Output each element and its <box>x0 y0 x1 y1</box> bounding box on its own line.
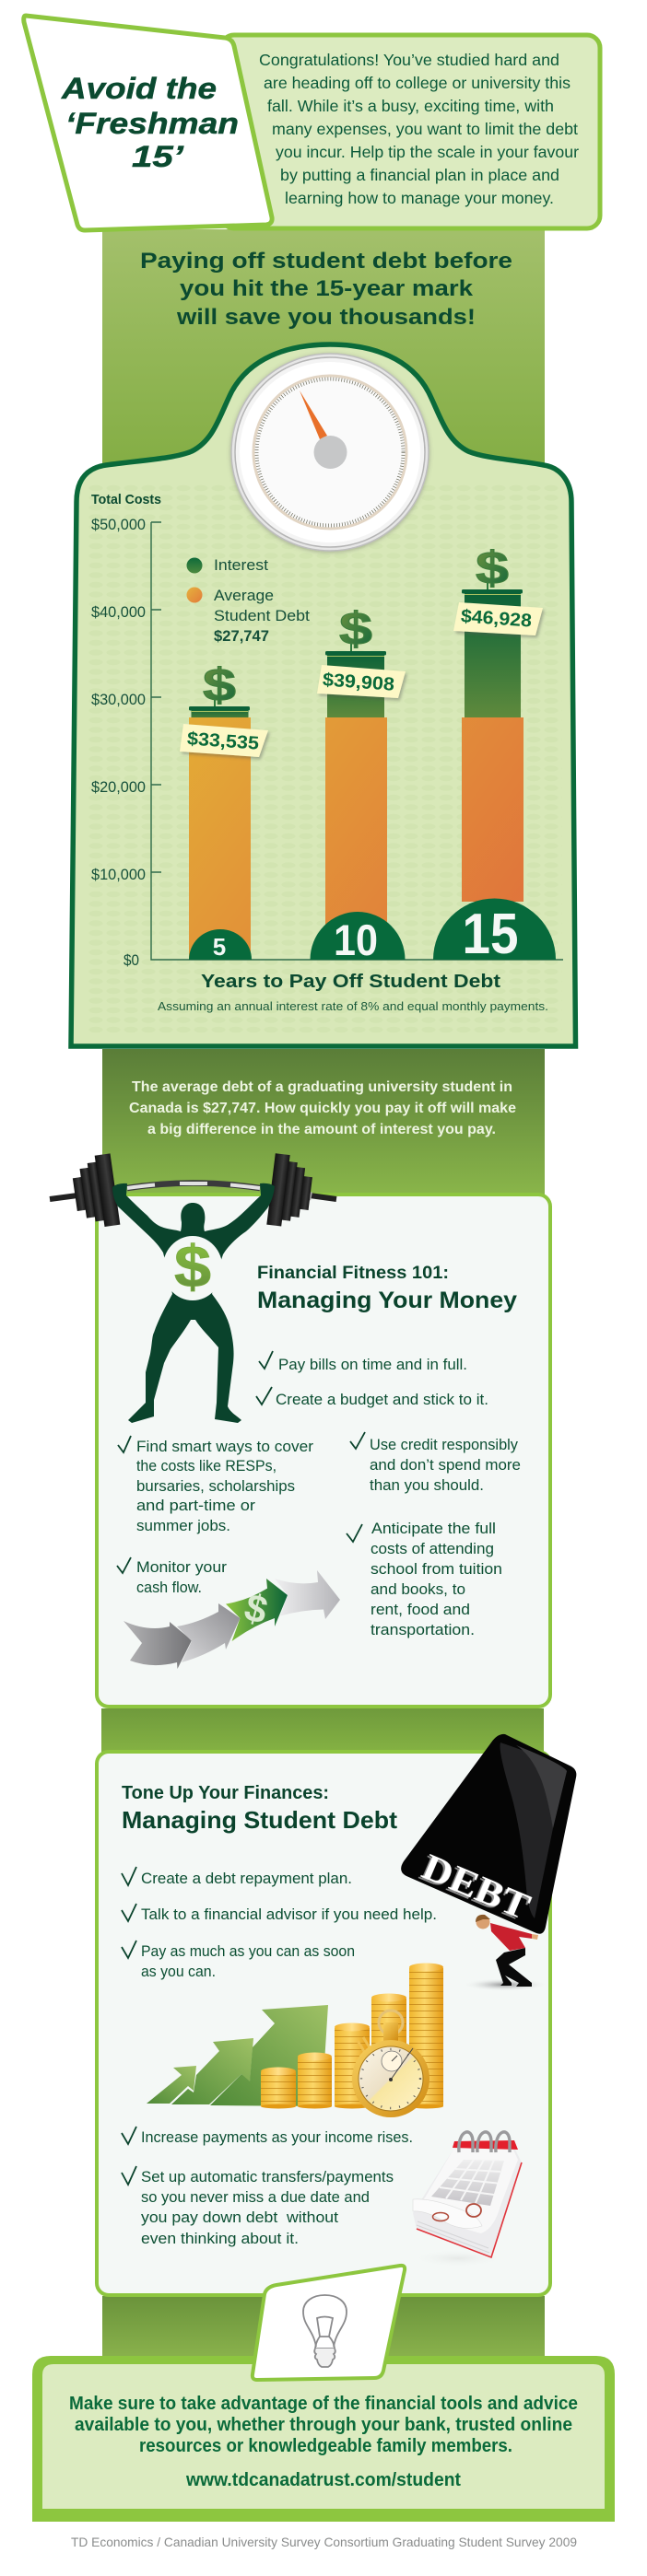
source note: TD Economics / Canadian University Survey Consortium Graduating Student Survey 2009 <box>71 2535 577 2549</box>
icon: scale dial <box>231 354 429 551</box>
checklist: right column: Use credit responsibly <box>370 1437 519 1453</box>
heading: tone up: Managing Student Debt <box>122 1806 397 1834</box>
checklist: right column: and books, to <box>371 1581 465 1598</box>
checklist: more debt tips <box>122 2127 413 2247</box>
intro paragraph: are heading off to college or university this <box>264 74 571 92</box>
intro paragraph: Congratulations! You’ve studied hard and <box>259 51 559 69</box>
bar: 5 years <box>180 659 268 961</box>
text: average debt: The average debt of a graduating university student in <box>132 1079 512 1095</box>
panel: tone up your finances <box>97 1734 576 2295</box>
icon: person carrying debt weight: DEBT <box>417 1846 536 1928</box>
intro paragraph: many expenses, you want to limit the debt <box>272 120 578 138</box>
bar: 15 years <box>433 542 556 966</box>
checklist: more debt tips: so you never miss a due date and <box>141 2188 370 2206</box>
checklist: left column: bursaries, scholarships <box>136 1478 295 1495</box>
bar: 5 years: $ <box>203 659 236 711</box>
intro paragraph: by putting a financial plan in place and <box>280 166 559 184</box>
checklist: right column: and don’t spend more <box>370 1457 521 1474</box>
icon: weightlifter <box>50 1153 336 1423</box>
icon: person carrying debt weight <box>401 1734 576 1991</box>
intro paragraph: fall. While it’s a busy, exciting time, with <box>267 97 554 115</box>
icon: coin stacks <box>261 1964 443 2109</box>
bar: 15 years: $ <box>476 542 509 594</box>
y axis: $40,000 <box>91 603 146 621</box>
checklist: right column: Anticipate the full <box>371 1521 496 1537</box>
y axis: $0 <box>124 951 139 969</box>
icon: weightlifter: $ <box>174 1233 211 1300</box>
checklist: more debt tips: Increase payments as your income rises. <box>141 2128 413 2146</box>
intro paragraph: you incur. Help tip the scale in your favour <box>276 143 579 161</box>
closing text: available to you, whether through your bank, trusted online <box>75 2415 572 2435</box>
heading: paying off debt <box>140 249 512 330</box>
checklist: right column: than you should. <box>370 1477 484 1494</box>
icon: stopwatch <box>352 2011 429 2117</box>
checklist: debt tips: Create a debt repayment plan. <box>141 1870 352 1887</box>
checklist: more debt tips: Set up automatic transfers/payments <box>141 2168 394 2186</box>
legend <box>186 557 310 645</box>
closing text: www.tdcanadatrust.com/student <box>185 2470 461 2490</box>
checklist: left column: Find smart ways to cover <box>136 1439 314 1455</box>
y axis: $20,000 <box>91 778 146 796</box>
green column background <box>101 229 545 2359</box>
label: total costs: Total Costs <box>91 492 161 507</box>
checklist: top items: Pay bills on time and in full. <box>278 1357 467 1373</box>
checklist: left column: and part-time or <box>136 1498 256 1514</box>
assumption note: Assuming an annual interest rate of 8% and equal monthly payments. <box>158 999 548 1013</box>
closing text: resources or knowledgeable family members. <box>139 2436 512 2456</box>
heading: paying off debt: Paying off student debt before <box>140 249 512 274</box>
bar: 15 years: $46,928 <box>460 606 533 632</box>
heading: financial fitness: Managing Your Money <box>257 1288 517 1313</box>
bar: 10 years: $ <box>339 603 372 655</box>
panel: financial fitness <box>50 1153 550 1707</box>
intro paragraph <box>259 51 579 207</box>
heading: financial fitness: Financial Fitness 101: <box>257 1264 449 1283</box>
legend: Average <box>214 588 274 604</box>
heading: paying off debt: will save you thousands! <box>176 305 476 330</box>
bar: 5 years: $33,535 <box>186 729 260 754</box>
checklist: more debt tips: you pay down debt without <box>141 2209 338 2226</box>
icon: rising green arrows <box>147 2005 328 2106</box>
bar: 10 years <box>310 603 406 964</box>
heading: paying off debt: you hit the 15-year mark <box>180 276 474 301</box>
intro paragraph: learning how to manage your money. <box>285 189 554 207</box>
text: average debt: Canada is $27,747. How quickly you pay it off will make <box>129 1101 516 1116</box>
panel: closing advice <box>32 2356 615 2522</box>
text: average debt <box>129 1079 516 1137</box>
bar: 15 years: 15 <box>463 903 518 966</box>
title text: Avoid the <box>61 72 217 105</box>
icon: calendar <box>410 2132 522 2267</box>
y axis: $30,000 <box>91 691 146 708</box>
checklist: right column: school from tuition <box>371 1561 502 1578</box>
panel: lightbulb tab <box>253 2266 405 2380</box>
heading: financial fitness <box>257 1264 517 1313</box>
checklist: top items <box>256 1351 488 1408</box>
checklist: debt tips: Talk to a financial advisor if you need help. <box>141 1906 437 1923</box>
checklist: debt tips: Pay as much as you can as soon <box>141 1942 355 1960</box>
needle <box>300 390 327 439</box>
checklist: left column: the costs like RESPs, <box>136 1458 276 1474</box>
checklist: debt tips: as you can. <box>141 1963 216 1980</box>
checklist: more debt tips: even thinking about it. <box>141 2230 299 2247</box>
checklist: debt tips <box>122 1867 437 1980</box>
icon: cash flow arrows: $ <box>241 1585 272 1632</box>
legend: $27,747 <box>214 628 269 645</box>
checklist: top items: Create a budget and stick to it. <box>276 1392 488 1408</box>
title text: ‘Freshman <box>65 107 239 140</box>
heading: tone up: Tone Up Your Finances: <box>122 1783 329 1803</box>
checklist: left column: summer jobs. <box>136 1518 230 1534</box>
checklist: left column: cash flow. <box>136 1579 202 1596</box>
checklist: right column <box>347 1432 521 1638</box>
closing text: Make sure to take advantage of the financial tools and advice <box>69 2394 578 2414</box>
checklist: right column: costs of attending <box>371 1541 494 1557</box>
checklist: left column <box>117 1436 314 1596</box>
icon: cash flow arrows <box>124 1570 340 1669</box>
y axis <box>91 516 563 969</box>
text: average debt: a big difference in the amount of interest you pay. <box>147 1122 496 1137</box>
bar: 10 years: $39,908 <box>322 670 395 695</box>
bar: 10 years: 10 <box>334 915 378 964</box>
axis title: Years to Pay Off Student Debt <box>201 971 500 992</box>
y axis: $50,000 <box>91 516 146 533</box>
heading: tone up <box>122 1783 397 1834</box>
legend: Student Debt <box>214 608 310 624</box>
icon: lightbulb <box>303 2295 347 2367</box>
bar: 5 years: 5 <box>213 933 226 961</box>
checklist: left column: Monitor your <box>136 1559 228 1576</box>
title text <box>61 72 239 173</box>
checklist: right column: rent, food and <box>371 1602 470 1618</box>
closing text <box>69 2394 578 2490</box>
panel: bathroom scale chart <box>71 344 575 1046</box>
checklist: right column: transportation. <box>371 1622 475 1638</box>
legend: Interest <box>214 557 268 574</box>
y axis: $10,000 <box>91 866 146 883</box>
panel: intro text <box>221 35 600 228</box>
title text: 15’ <box>132 140 184 173</box>
panel: title <box>24 16 272 230</box>
